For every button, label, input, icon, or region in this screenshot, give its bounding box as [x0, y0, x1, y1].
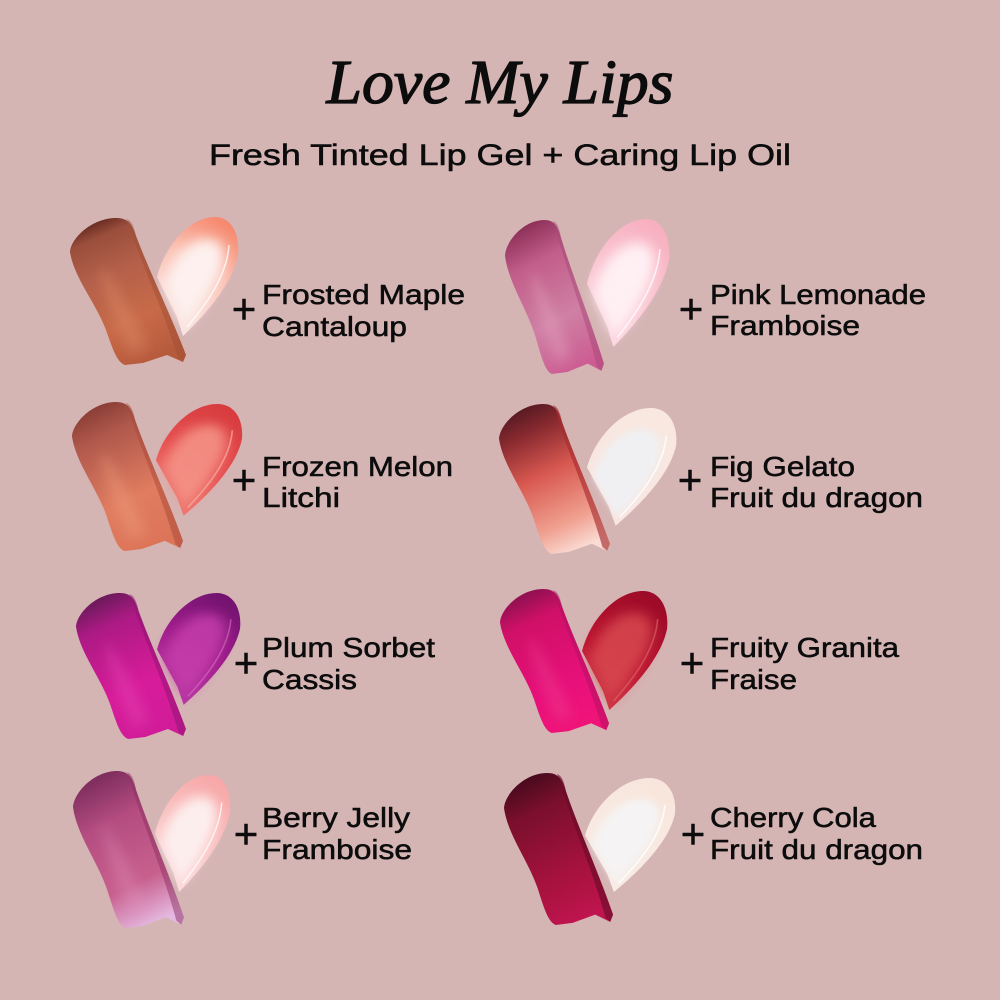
swatch: Cherry Cola + Fruit du dragon — [504, 773, 675, 925]
label: Fig Gelato Fruit du dragon — [710, 451, 923, 513]
label: Plum Sorbet Cassis — [262, 632, 435, 695]
swatch: Fruity Granita + Fraise — [500, 589, 667, 733]
label: Fruity Granita Fraise — [710, 632, 899, 695]
title: Love My Lips — [325, 49, 674, 117]
plus icon: + — [232, 456, 256, 503]
label: Frosted Maple Cantaloup — [262, 279, 465, 342]
label: Pink Lemonade Framboise: Framboise — [710, 310, 860, 341]
label: Fig Gelato Fruit du dragon: Fruit du dragon — [710, 482, 923, 513]
label: Pink Lemonade Framboise: Pink Lemonade — [710, 279, 926, 310]
plus icon: + — [678, 456, 702, 503]
label: Berry Jelly Framboise: Berry Jelly — [262, 802, 410, 833]
plus icon: + — [681, 810, 705, 857]
plus icon: + — [234, 639, 258, 686]
label: Plum Sorbet Cassis: Cassis — [262, 664, 357, 695]
label: Plum Sorbet Cassis: Plum Sorbet — [262, 632, 435, 663]
label: Fig Gelato Fruit du dragon: Fig Gelato — [710, 451, 855, 482]
label: Frozen Melon Litchi: Litchi — [262, 482, 340, 513]
label: Berry Jelly Framboise: Framboise — [262, 834, 412, 865]
label: Cherry Cola Fruit du dragon — [710, 802, 923, 865]
label: Fruity Granita Fraise: Fraise — [710, 664, 797, 695]
swatch: Berry Jelly + Framboise — [73, 771, 230, 928]
label: Frozen Melon Litchi — [262, 451, 453, 513]
swatch: Fig Gelato + Fruit du dragon — [499, 404, 676, 554]
swatch: Pink Lemonade + Framboise — [505, 219, 669, 374]
label: Frosted Maple Cantaloup: Cantaloup — [262, 311, 407, 342]
label: Pink Lemonade Framboise — [710, 279, 926, 341]
subtitle: Fresh Tinted Lip Gel + Caring Lip Oil — [209, 139, 791, 172]
label: Fruity Granita Fraise: Fruity Granita — [710, 632, 899, 663]
plus icon: + — [234, 810, 258, 857]
plus icon: + — [679, 285, 703, 332]
label: Cherry Cola Fruit du dragon: Cherry Cola — [710, 802, 876, 833]
swatch: Frosted Maple + Cantaloup — [70, 217, 238, 365]
plus icon: + — [232, 285, 256, 332]
label: Cherry Cola Fruit du dragon: Fruit du dragon — [710, 834, 923, 865]
plus icon: + — [680, 639, 704, 686]
label: Frozen Melon Litchi: Frozen Melon — [262, 451, 453, 482]
label: Frosted Maple Cantaloup: Frosted Maple — [262, 279, 465, 310]
swatch: Plum Sorbet + Cassis — [76, 593, 240, 739]
label: Berry Jelly Framboise — [262, 802, 412, 865]
swatch: Frozen Melon + Litchi — [72, 402, 242, 551]
